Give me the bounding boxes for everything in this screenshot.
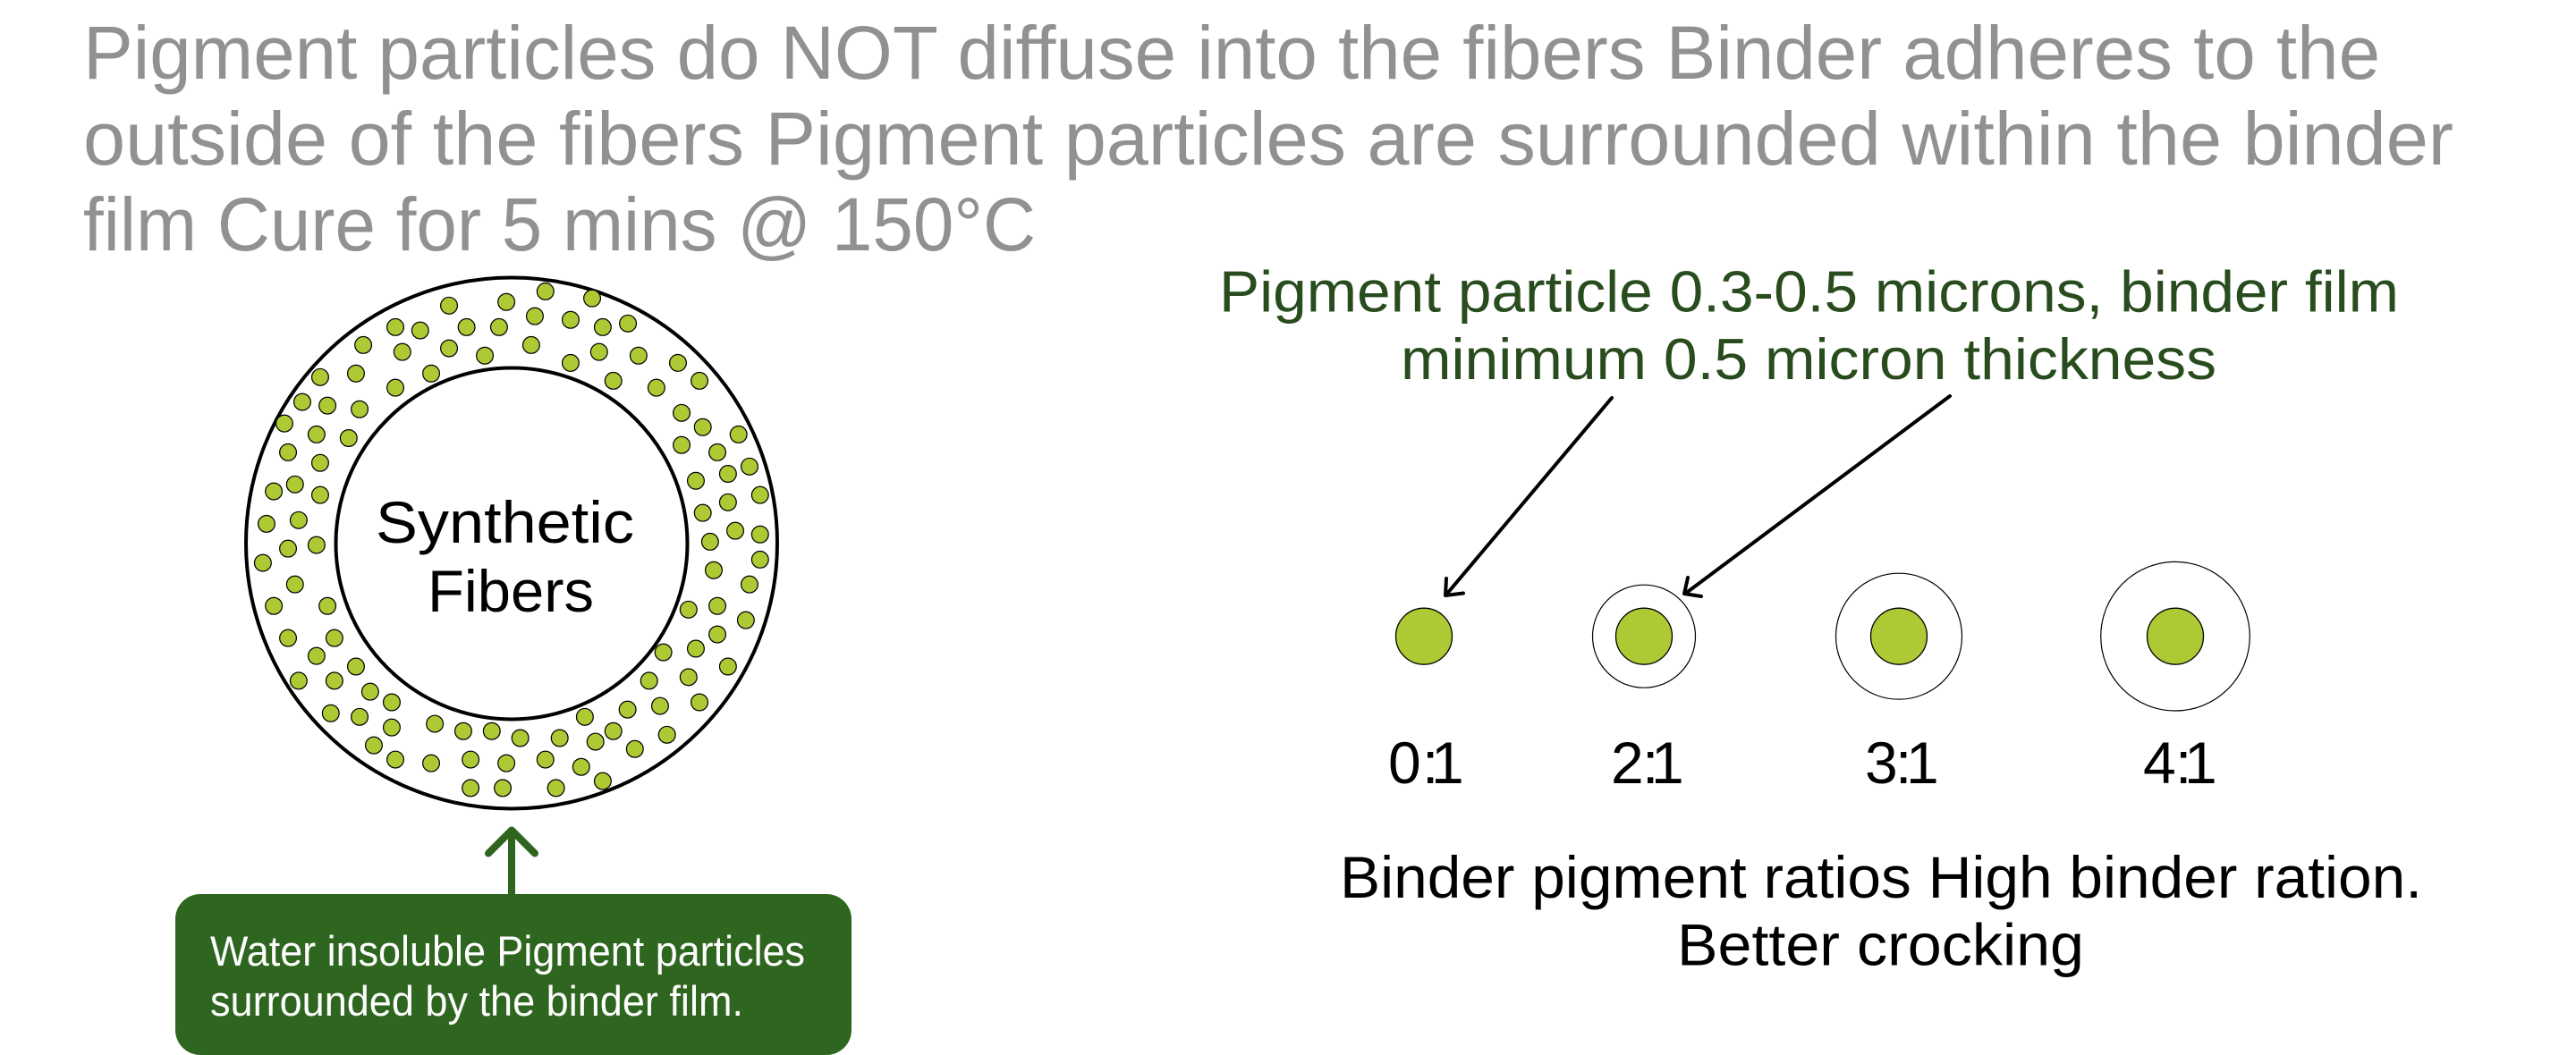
fiber label: Fibers xyxy=(428,558,594,624)
pigment particles xyxy=(254,283,768,797)
arrow: to binder film xyxy=(1684,396,1950,596)
ratio diagram 3:1 xyxy=(1835,573,1962,796)
callout: pigment particles: surrounded by the binder film. xyxy=(210,977,743,1025)
fiber label xyxy=(376,489,634,624)
text: binder pigment ratios: Better crocking xyxy=(1677,912,2084,978)
ratio diagram 4:1: 4:1 xyxy=(2143,730,2217,796)
fiber label: Synthetic xyxy=(376,489,634,555)
callout: pigment particles xyxy=(175,894,852,1055)
title: Pigment particles do NOT diffuse into the fibers Binder adheres to the xyxy=(83,11,2380,95)
ratio diagram 3:1: 3:1 xyxy=(1865,730,1939,796)
arrow: to pigment particle xyxy=(1445,398,1612,595)
arrow: callout to ring xyxy=(488,830,535,896)
ratio diagram 4:1 xyxy=(2101,561,2250,796)
callout: pigment particles: Water insoluble Pigment particles xyxy=(210,927,805,975)
ratio diagram 2:1 xyxy=(1592,585,1696,796)
ratio diagram 0:1: 0:1 xyxy=(1388,730,1464,796)
ratio diagram 2:1: 2:1 xyxy=(1611,730,1684,796)
title: film Cure for 5 mins @ 150°C xyxy=(83,182,1036,266)
text: binder pigment ratios: Binder pigment ratios High binder ration. xyxy=(1340,844,2422,910)
synthetic fiber core xyxy=(336,368,687,719)
heading: pigment particle size: Pigment particle 0.3-0.5 microns, binder film xyxy=(1219,259,2399,324)
text: binder pigment ratios xyxy=(1340,844,2422,978)
ratio diagram 0:1 xyxy=(1388,608,1464,796)
title: outside of the fibers Pigment particles are surrounded within the binder xyxy=(83,97,2453,181)
heading: pigment particle size: minimum 0.5 micron thickness xyxy=(1401,326,2216,392)
heading: pigment particle size xyxy=(1219,259,2399,392)
binder film ring xyxy=(246,277,777,808)
title xyxy=(83,11,2453,266)
panel: fiber cross-section diagram xyxy=(246,277,777,808)
